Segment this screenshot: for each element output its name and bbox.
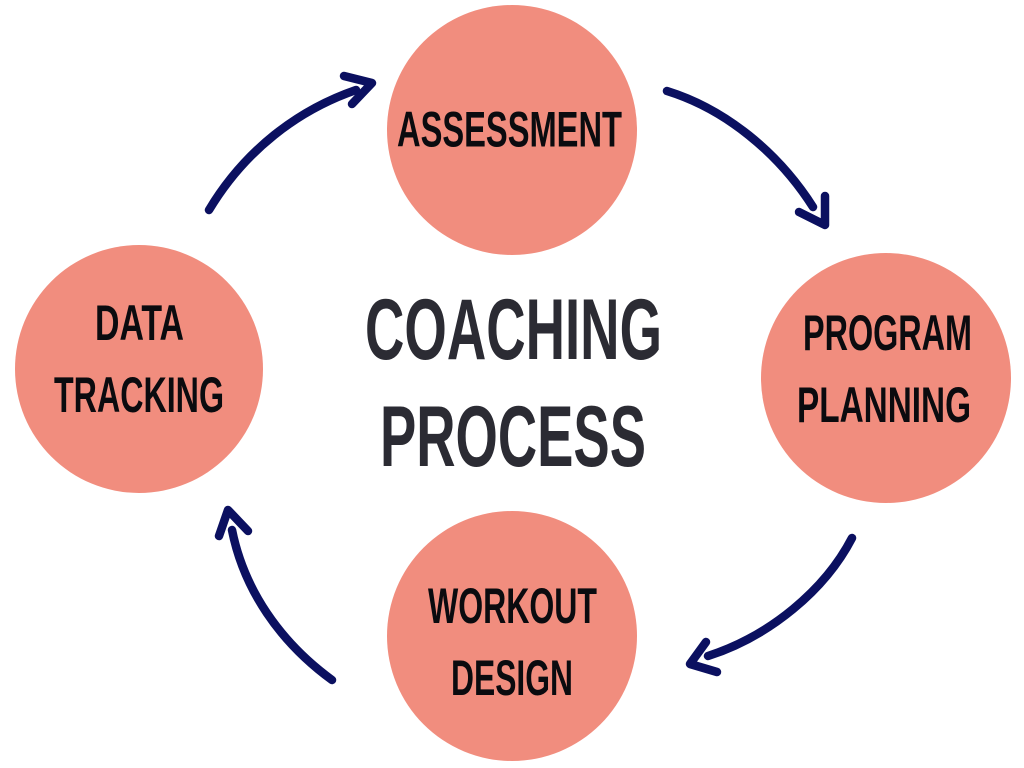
step: assessment bbox=[387, 5, 637, 255]
step: workout design: WORKOUT bbox=[428, 578, 597, 634]
step: program planning bbox=[761, 253, 1011, 503]
arrow: assessment to program planning bbox=[667, 91, 825, 225]
arrow: data tracking to assessment bbox=[209, 76, 372, 210]
step: data tracking: TRACKING bbox=[54, 367, 224, 423]
step: workout design bbox=[387, 511, 637, 761]
title: coaching process: PROCESS bbox=[380, 389, 646, 485]
title: coaching process: COACHING bbox=[365, 282, 662, 378]
step: data tracking bbox=[15, 245, 263, 493]
step: data tracking: DATA bbox=[95, 295, 184, 351]
title: coaching process bbox=[365, 282, 662, 485]
step: assessment: ASSESSMENT bbox=[397, 102, 622, 158]
arrow: workout design to data tracking bbox=[219, 510, 332, 680]
arrow: program planning to workout design bbox=[690, 538, 852, 672]
step: workout design: DESIGN bbox=[451, 650, 573, 706]
